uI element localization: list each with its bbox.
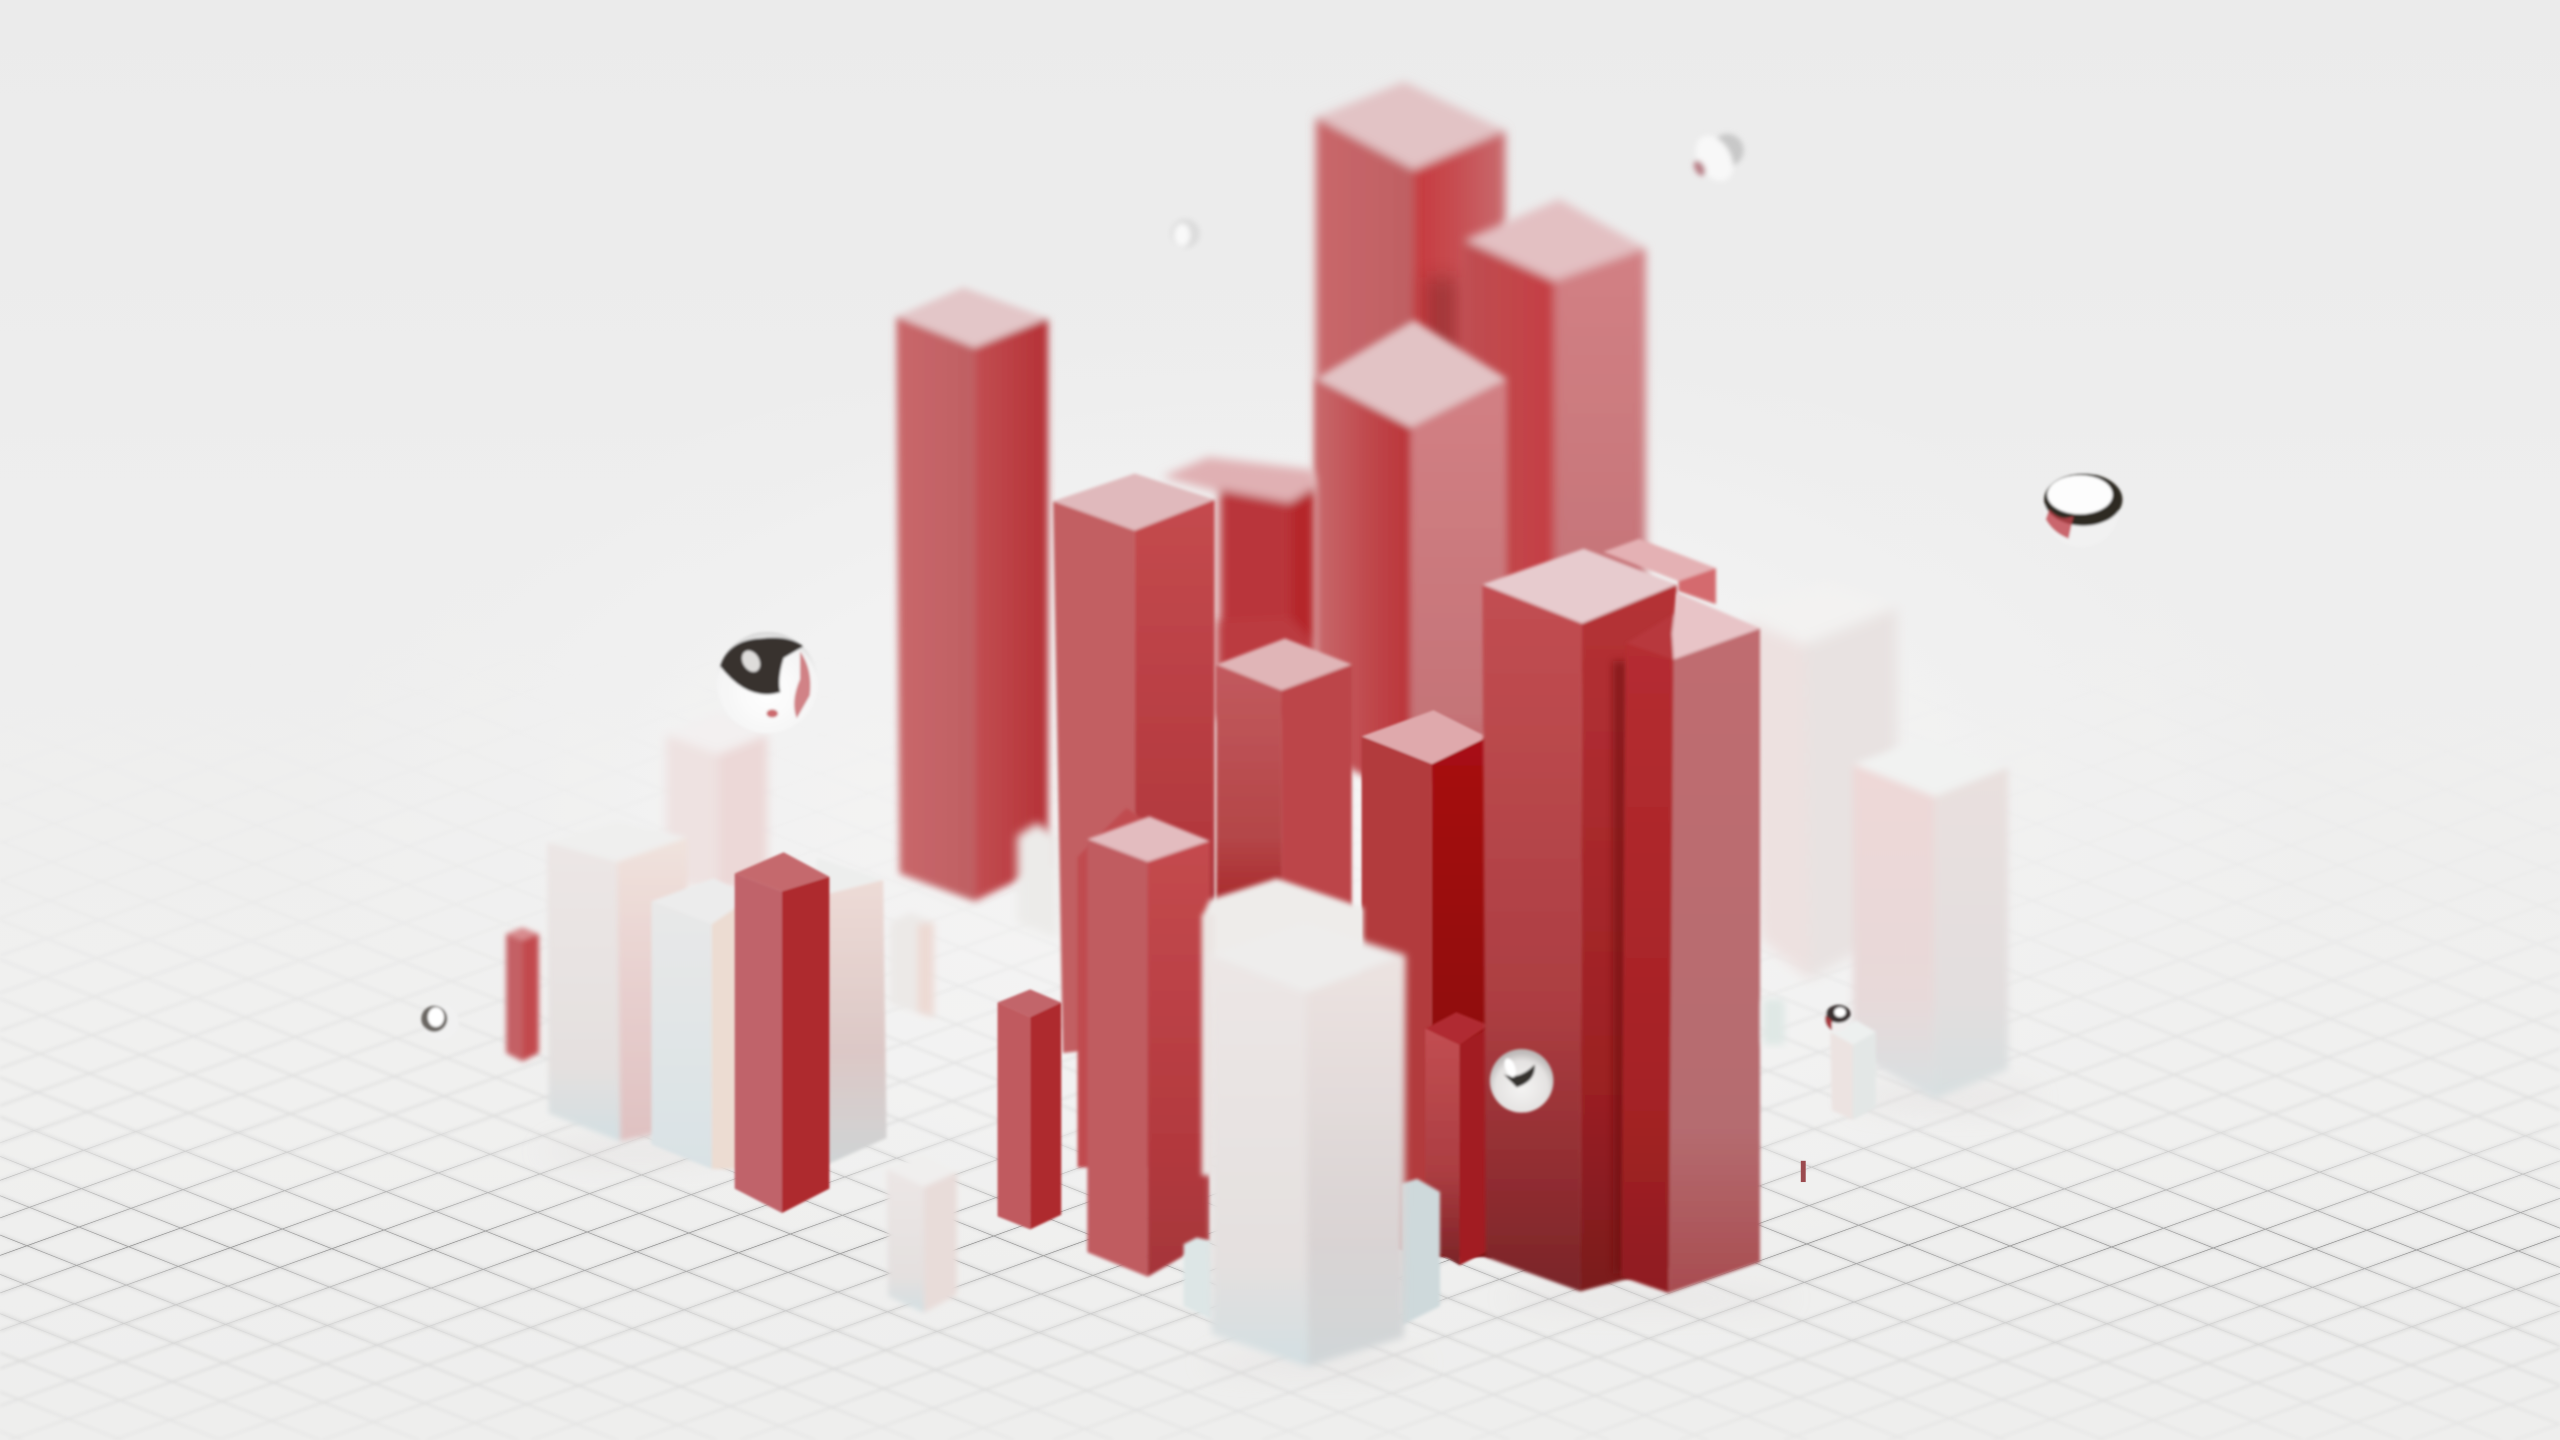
sphere: front on red bar xyxy=(1490,1049,1553,1113)
tick: tiny red bar xyxy=(1801,1161,1806,1182)
bar: small white rear xyxy=(1017,823,1058,939)
shadow: seam between large red bars xyxy=(1613,661,1626,1273)
sphere: small right xyxy=(1824,1005,1851,1032)
sphere: upper right xyxy=(2044,472,2122,547)
bar: white front large xyxy=(1210,922,1406,1367)
bar: red dark tall centre right xyxy=(1362,710,1492,1257)
bar: white left large xyxy=(547,821,687,1141)
bar: small white front xyxy=(887,1154,957,1313)
bar: tall red far left xyxy=(896,287,1048,901)
floor grid: out of focus xyxy=(0,1020,2560,1416)
shadow: seam between rear bars xyxy=(1427,278,1456,424)
bar: tall red rear xyxy=(1316,82,1505,522)
bar: short red stub xyxy=(1425,1012,1492,1265)
bar: small red centre front xyxy=(998,989,1061,1229)
block: faint green white xyxy=(1763,999,1784,1045)
bar: large red right xyxy=(1482,549,1678,1291)
bar: red front centre xyxy=(1087,816,1210,1277)
sphere: blurred top small xyxy=(1171,219,1200,248)
central floor glow xyxy=(294,327,2318,1306)
bar: small red behind right cluster xyxy=(1603,539,1716,604)
bar: white right xyxy=(1853,738,2008,1099)
bar: white left short xyxy=(651,878,738,1169)
bar: pale white rear right xyxy=(1739,584,1897,980)
bar: tall red rear right xyxy=(1464,199,1646,686)
bar: red front left xyxy=(735,852,829,1213)
bar: white behind front xyxy=(1202,878,1363,1176)
bar: small white right xyxy=(1830,1020,1876,1120)
bar: white behind small red xyxy=(816,857,887,1166)
bars: small red middle back xyxy=(1162,457,1316,718)
block: small white left of front xyxy=(1184,1238,1211,1319)
sphere: small left xyxy=(421,1004,459,1040)
bar: pale white far left xyxy=(666,712,767,890)
block: white right of front xyxy=(1401,1179,1440,1326)
bar: small white rear left xyxy=(890,913,934,1017)
floor grid: in focus band xyxy=(0,1134,2560,1338)
sphere: blurred top xyxy=(1688,129,1744,188)
bar: red centre xyxy=(1316,320,1507,800)
bar: red narrow behind front left xyxy=(1078,808,1151,1167)
bar: large red far right xyxy=(1621,593,1760,1293)
bar: red left tiny xyxy=(506,927,539,1061)
sphere: large left xyxy=(717,632,818,733)
bar: red left middle xyxy=(1053,473,1215,1053)
bar: red middle xyxy=(1216,638,1352,931)
soft floor shadows xyxy=(539,1084,2041,1373)
